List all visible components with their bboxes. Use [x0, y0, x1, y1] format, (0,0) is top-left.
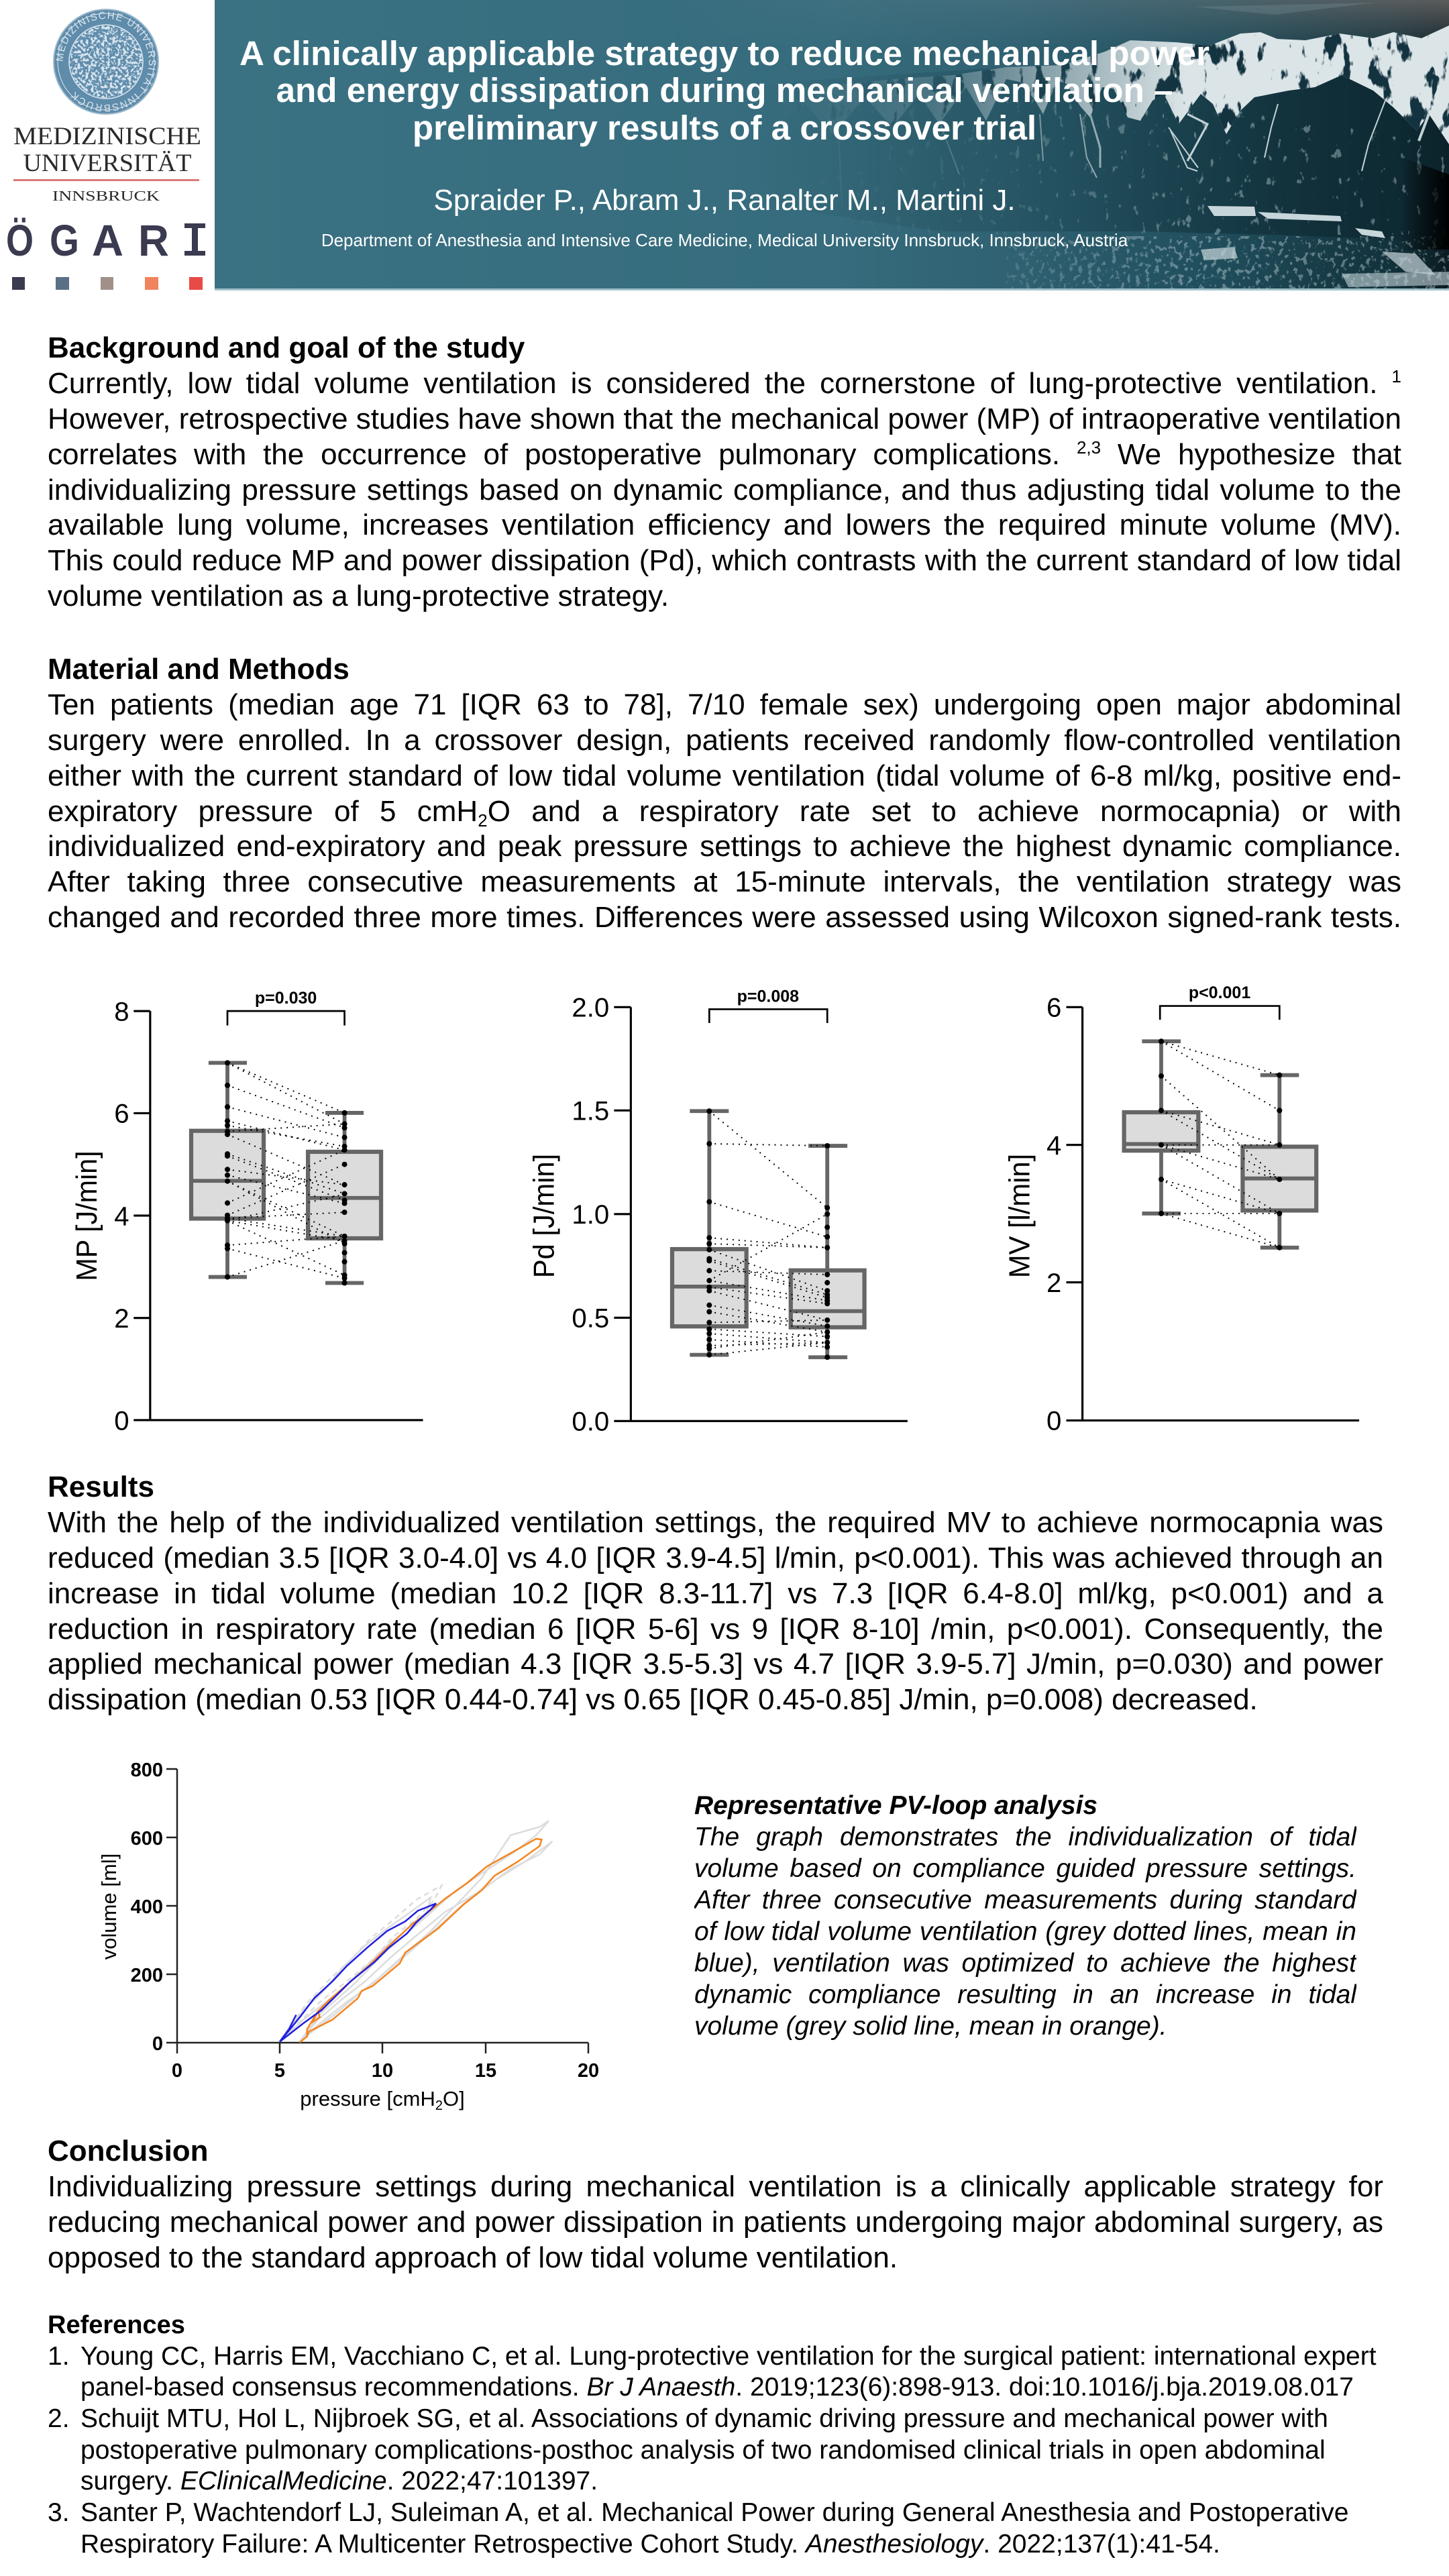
axis title: Pd [J/min]	[528, 1154, 561, 1278]
body text: reducing mechanical power and power dissipation in patients undergoing major abdominal surgery, as	[48, 2206, 1383, 2239]
section: material and methods	[48, 652, 1401, 936]
axes	[133, 1011, 423, 1420]
reference list: surgery. EClinicalMedicine. 2022;47:101397.	[80, 2467, 598, 2496]
OEGARI logo: G	[50, 215, 79, 265]
reference list: postoperative pulmonary complications-posthoc analysis of two randomised clinical trials in open abdominal	[80, 2436, 1326, 2465]
body text: applied mechanical power (median 4.3 [IQR 3.5-5.3] vs 4.7 [IQR 3.9-5.7] J/min, p=0.030) and power	[48, 1648, 1383, 1680]
reference list: 1.	[48, 2342, 70, 2371]
valley fields	[1201, 206, 1449, 287]
tick labels: 1.0	[572, 1199, 609, 1230]
tick labels y: 400	[131, 1896, 163, 1918]
body text: dissipation (median 0.53 [IQR 0.44-0.74] vs 0.65 [IQR 0.45-0.85] J/min, p=0.008) decreased.	[48, 1683, 1258, 1716]
tick labels y: 200	[131, 1965, 163, 1986]
tick labels x: 15	[475, 2060, 496, 2082]
OEGARI logo: R	[138, 215, 169, 265]
OEGARI logo	[0, 208, 215, 295]
axes	[166, 1769, 588, 2053]
university logo	[13, 9, 201, 204]
tick labels: 0.0	[572, 1407, 609, 1437]
tick labels x: 20	[578, 2060, 599, 2082]
body text: After taking three consecutive measurements at 15-minute intervals, the ventilation strategy was	[48, 865, 1401, 898]
tick labels: 0	[1046, 1406, 1061, 1436]
body text: volume ventilation as a lung-protective strategy.	[48, 580, 669, 612]
y axis title: volume [ml]	[97, 1854, 121, 1960]
caption text: After three consecutive measurements during standard	[694, 1886, 1356, 1915]
axis title: MP [J/min]	[70, 1150, 103, 1281]
caption: PV-loop analysis	[694, 1790, 1356, 2042]
references heading: References	[48, 2311, 185, 2339]
mean loop optimized (orange)	[300, 1839, 541, 2043]
body text: Currently, low tidal volume ventilation is considered the cornerstone of lung-protective ventilation. 1	[48, 366, 1401, 400]
title: and energy dissipation during mechanical ventilation –	[276, 71, 1173, 109]
tick labels x: 5	[274, 2060, 285, 2082]
body text: changed and recorded three more times. Differences were assessed using Wilcoxon signed-rank tests.	[48, 901, 1401, 934]
tick labels: 4	[114, 1201, 129, 1231]
box plot: Pd	[510, 973, 979, 1442]
body text	[48, 366, 1401, 614]
tick labels: 2	[114, 1303, 129, 1334]
body text: This could reduce MP and power dissipation (Pd), which contrasts with the current standard of low tidal	[48, 544, 1401, 577]
heading: Material and Methods	[48, 653, 350, 686]
black fade at right edge	[1402, 158, 1449, 250]
data points	[706, 1108, 830, 1360]
tick labels: 4	[1046, 1130, 1061, 1161]
box standard	[1124, 1041, 1198, 1214]
tick labels: 0	[114, 1405, 129, 1436]
wordmark: INNSBRUCK	[52, 188, 160, 204]
affiliation: Department of Anesthesia and Intensive Care Medicine, Medical University Innsbruck, Innsbruck, Austria	[321, 230, 1128, 250]
body text: individualized end-expiratory and peak pressure settings to achieve the highest dynamic compliance.	[48, 830, 1401, 863]
box standard	[191, 1063, 264, 1277]
tick labels y	[131, 1760, 163, 2055]
reference list: 2.	[48, 2404, 70, 2433]
x axis title: O]	[443, 2087, 465, 2110]
paired lines	[227, 1063, 345, 1278]
reference list: panel-based consensus recommendations. Br J Anaesth. 2019;123(6):898-913. doi:10.1016/j.bja.2019.08.017	[80, 2373, 1354, 2402]
authors: Spraider P., Abram J., Ranalter M., Martini J.	[433, 184, 1016, 217]
significance bracket	[1160, 983, 1279, 1020]
body text	[48, 1505, 1383, 1718]
valley town texture	[1006, 236, 1449, 290]
tick labels	[114, 996, 129, 1436]
wordmark	[13, 123, 201, 204]
tick labels y: 800	[131, 1760, 163, 1781]
significance bracket	[709, 987, 827, 1023]
box plot: MP	[40, 973, 510, 1442]
axes	[1066, 1007, 1359, 1420]
caption text	[694, 1821, 1356, 2042]
caption heading: Representative PV-loop analysis	[694, 1791, 1097, 1820]
box individualized	[308, 1113, 381, 1283]
icon: university seal: MEDIZINISCHE UNIVERSITÄT INNSBRUCK	[56, 12, 156, 111]
grey individual loops	[280, 1821, 553, 2041]
OEGARI logo: A	[92, 215, 123, 265]
body text: reduction in respiratory rate (median 6 [IQR 5-6] vs 9 [IQR 8-10] /min, p<0.001). Consequently, the	[48, 1613, 1383, 1646]
body text: either with the current standard of low tidal volume ventilation (tidal volume of 6-8 ml/kg, positive end-	[48, 759, 1401, 792]
section: conclusion	[48, 2134, 1383, 2276]
title: preliminary results of a crossover trial	[413, 109, 1036, 147]
body text: individualizing pressure settings based on dynamic compliance, and thus adjusting tidal volume to the	[48, 474, 1401, 506]
tick labels: 2.0	[572, 993, 609, 1023]
section: background and goal	[48, 331, 1401, 614]
heading: Results	[48, 1470, 154, 1503]
tick labels: 6	[114, 1099, 129, 1129]
reference list: Schuijt MTU, Hol L, Nijbroek SG, et al. Associations of dynamic driving pressure and mechanical power with	[80, 2404, 1328, 2433]
box standard	[672, 1111, 747, 1355]
caption text: blue), ventilation was optimized to achieve the highest	[694, 1949, 1356, 1978]
reference list	[48, 2341, 1430, 2560]
body text: Individualizing pressure settings during mechanical ventilation is a clinically applicable strategy for	[48, 2170, 1383, 2203]
body text: surgery were enrolled. In a crossover design, patients received randomly flow-controlled ventilation	[48, 724, 1401, 757]
caption text: The graph demonstrates the individualization of tidal	[694, 1823, 1356, 1851]
axes	[614, 1007, 908, 1421]
body text: expiratory pressure of 5 cmH2O and a respiratory rate set to achieve normocapnia) or with	[48, 795, 1401, 829]
body text: However, retrospective studies have shown that the mechanical power (MP) of intraoperative ventilation	[48, 402, 1401, 435]
body text: correlates with the occurrence of postoperative pulmonary complications. 2,3 We hypothesize that	[48, 437, 1401, 471]
tick labels: 0.5	[572, 1303, 609, 1334]
snow streaks	[839, 101, 1429, 201]
body text: increase in tidal volume (median 10.2 [IQR 8.3-11.7] vs 7.3 [IQR 6.4-8.0] ml/kg, p<0.001) and a	[48, 1577, 1383, 1610]
x axis title: 2	[435, 2098, 443, 2113]
data points	[225, 1060, 347, 1286]
tick labels	[1046, 993, 1061, 1436]
PV-loop chart	[67, 1744, 637, 2120]
mean loop standard (blue)	[280, 1903, 436, 2042]
body text	[48, 2169, 1383, 2276]
reference list: Respiratory Failure: A Multicenter Retrospective Cohort Study. Anesthesiology. 2022;137(1):41-54.	[80, 2530, 1220, 2559]
dark mountain body	[671, 25, 1449, 241]
tick labels: 1.5	[572, 1096, 609, 1126]
tick labels: 6	[1046, 993, 1061, 1023]
caption text: volume based on compliance guided pressure settings.	[694, 1854, 1356, 1883]
significance bracket: p=0.030	[255, 989, 317, 1008]
title	[239, 34, 1210, 147]
body text: Ten patients (median age 71 [IQR 63 to 78], 7/10 female sex) undergoing open major abdominal	[48, 688, 1401, 721]
body text: reduced (median 3.5 [IQR 3.0-4.0] vs 4.0 [IQR 3.9-4.5] l/min, p<0.001). This was achieved through an	[48, 1542, 1383, 1574]
x axis title: pressure [cmH	[300, 2087, 435, 2110]
wordmark: UNIVERSITÄT	[23, 150, 192, 177]
tick labels y: 600	[131, 1828, 163, 1849]
data points	[1159, 1038, 1282, 1250]
tick labels y: 0	[152, 2033, 163, 2055]
paired lines	[1161, 1041, 1279, 1248]
body text: With the help of the individualized ventilation settings, the required MV to achieve normocapnia was	[48, 1506, 1383, 1539]
reference list: Santer P, Wachtendorf LJ, Suleiman A, et al. Mechanical Power during General Anesthesia and Postoperative	[80, 2498, 1348, 2527]
reference list: 3.	[48, 2498, 70, 2527]
tick labels	[572, 993, 609, 1437]
caption text: dynamic compliance resulting in an increase in tidal	[694, 1980, 1356, 2009]
header banner with mountain image	[215, 0, 1449, 290]
significance bracket: p=0.008	[737, 987, 799, 1006]
body text	[48, 688, 1401, 936]
axis title: MV [l/min]	[1004, 1154, 1036, 1278]
references	[48, 2310, 1430, 2560]
significance bracket	[227, 989, 345, 1026]
box individualized	[1242, 1075, 1316, 1248]
caption text: of low tidal volume ventilation (grey dotted lines, mean in	[694, 1917, 1356, 1946]
tick labels x: 0	[172, 2060, 182, 2082]
box plot: MV	[979, 973, 1449, 1442]
section: results	[48, 1470, 1383, 1718]
tick labels: 8	[114, 996, 129, 1026]
body text: opposed to the standard approach of low tidal volume ventilation.	[48, 2241, 898, 2274]
wordmark: MEDIZINISCHE	[13, 123, 201, 150]
snow field with rock texture	[817, 25, 1449, 288]
significance bracket: p<0.001	[1189, 983, 1250, 1002]
tick labels x	[172, 2060, 599, 2082]
title: A clinically applicable strategy to reduce mechanical power	[239, 34, 1210, 72]
box individualized	[791, 1146, 865, 1357]
colour squares	[12, 277, 203, 290]
paired lines	[709, 1111, 827, 1355]
tick labels: 2	[1046, 1268, 1061, 1298]
heading: Background and goal of the study	[48, 331, 525, 364]
tick labels x: 10	[372, 2060, 393, 2082]
heading: Conclusion	[48, 2135, 209, 2167]
OEGARI logo: Ö	[6, 215, 34, 265]
reference list: Young CC, Harris EM, Vacchiano C, et al. Lung-protective ventilation for the surgical patient: international expert	[80, 2342, 1377, 2371]
body text: available lung volume, increases ventilation efficiency and lowers the required minute volume (MV).	[48, 508, 1401, 541]
caption text: volume (grey solid line, mean in orange).	[694, 2012, 1167, 2041]
